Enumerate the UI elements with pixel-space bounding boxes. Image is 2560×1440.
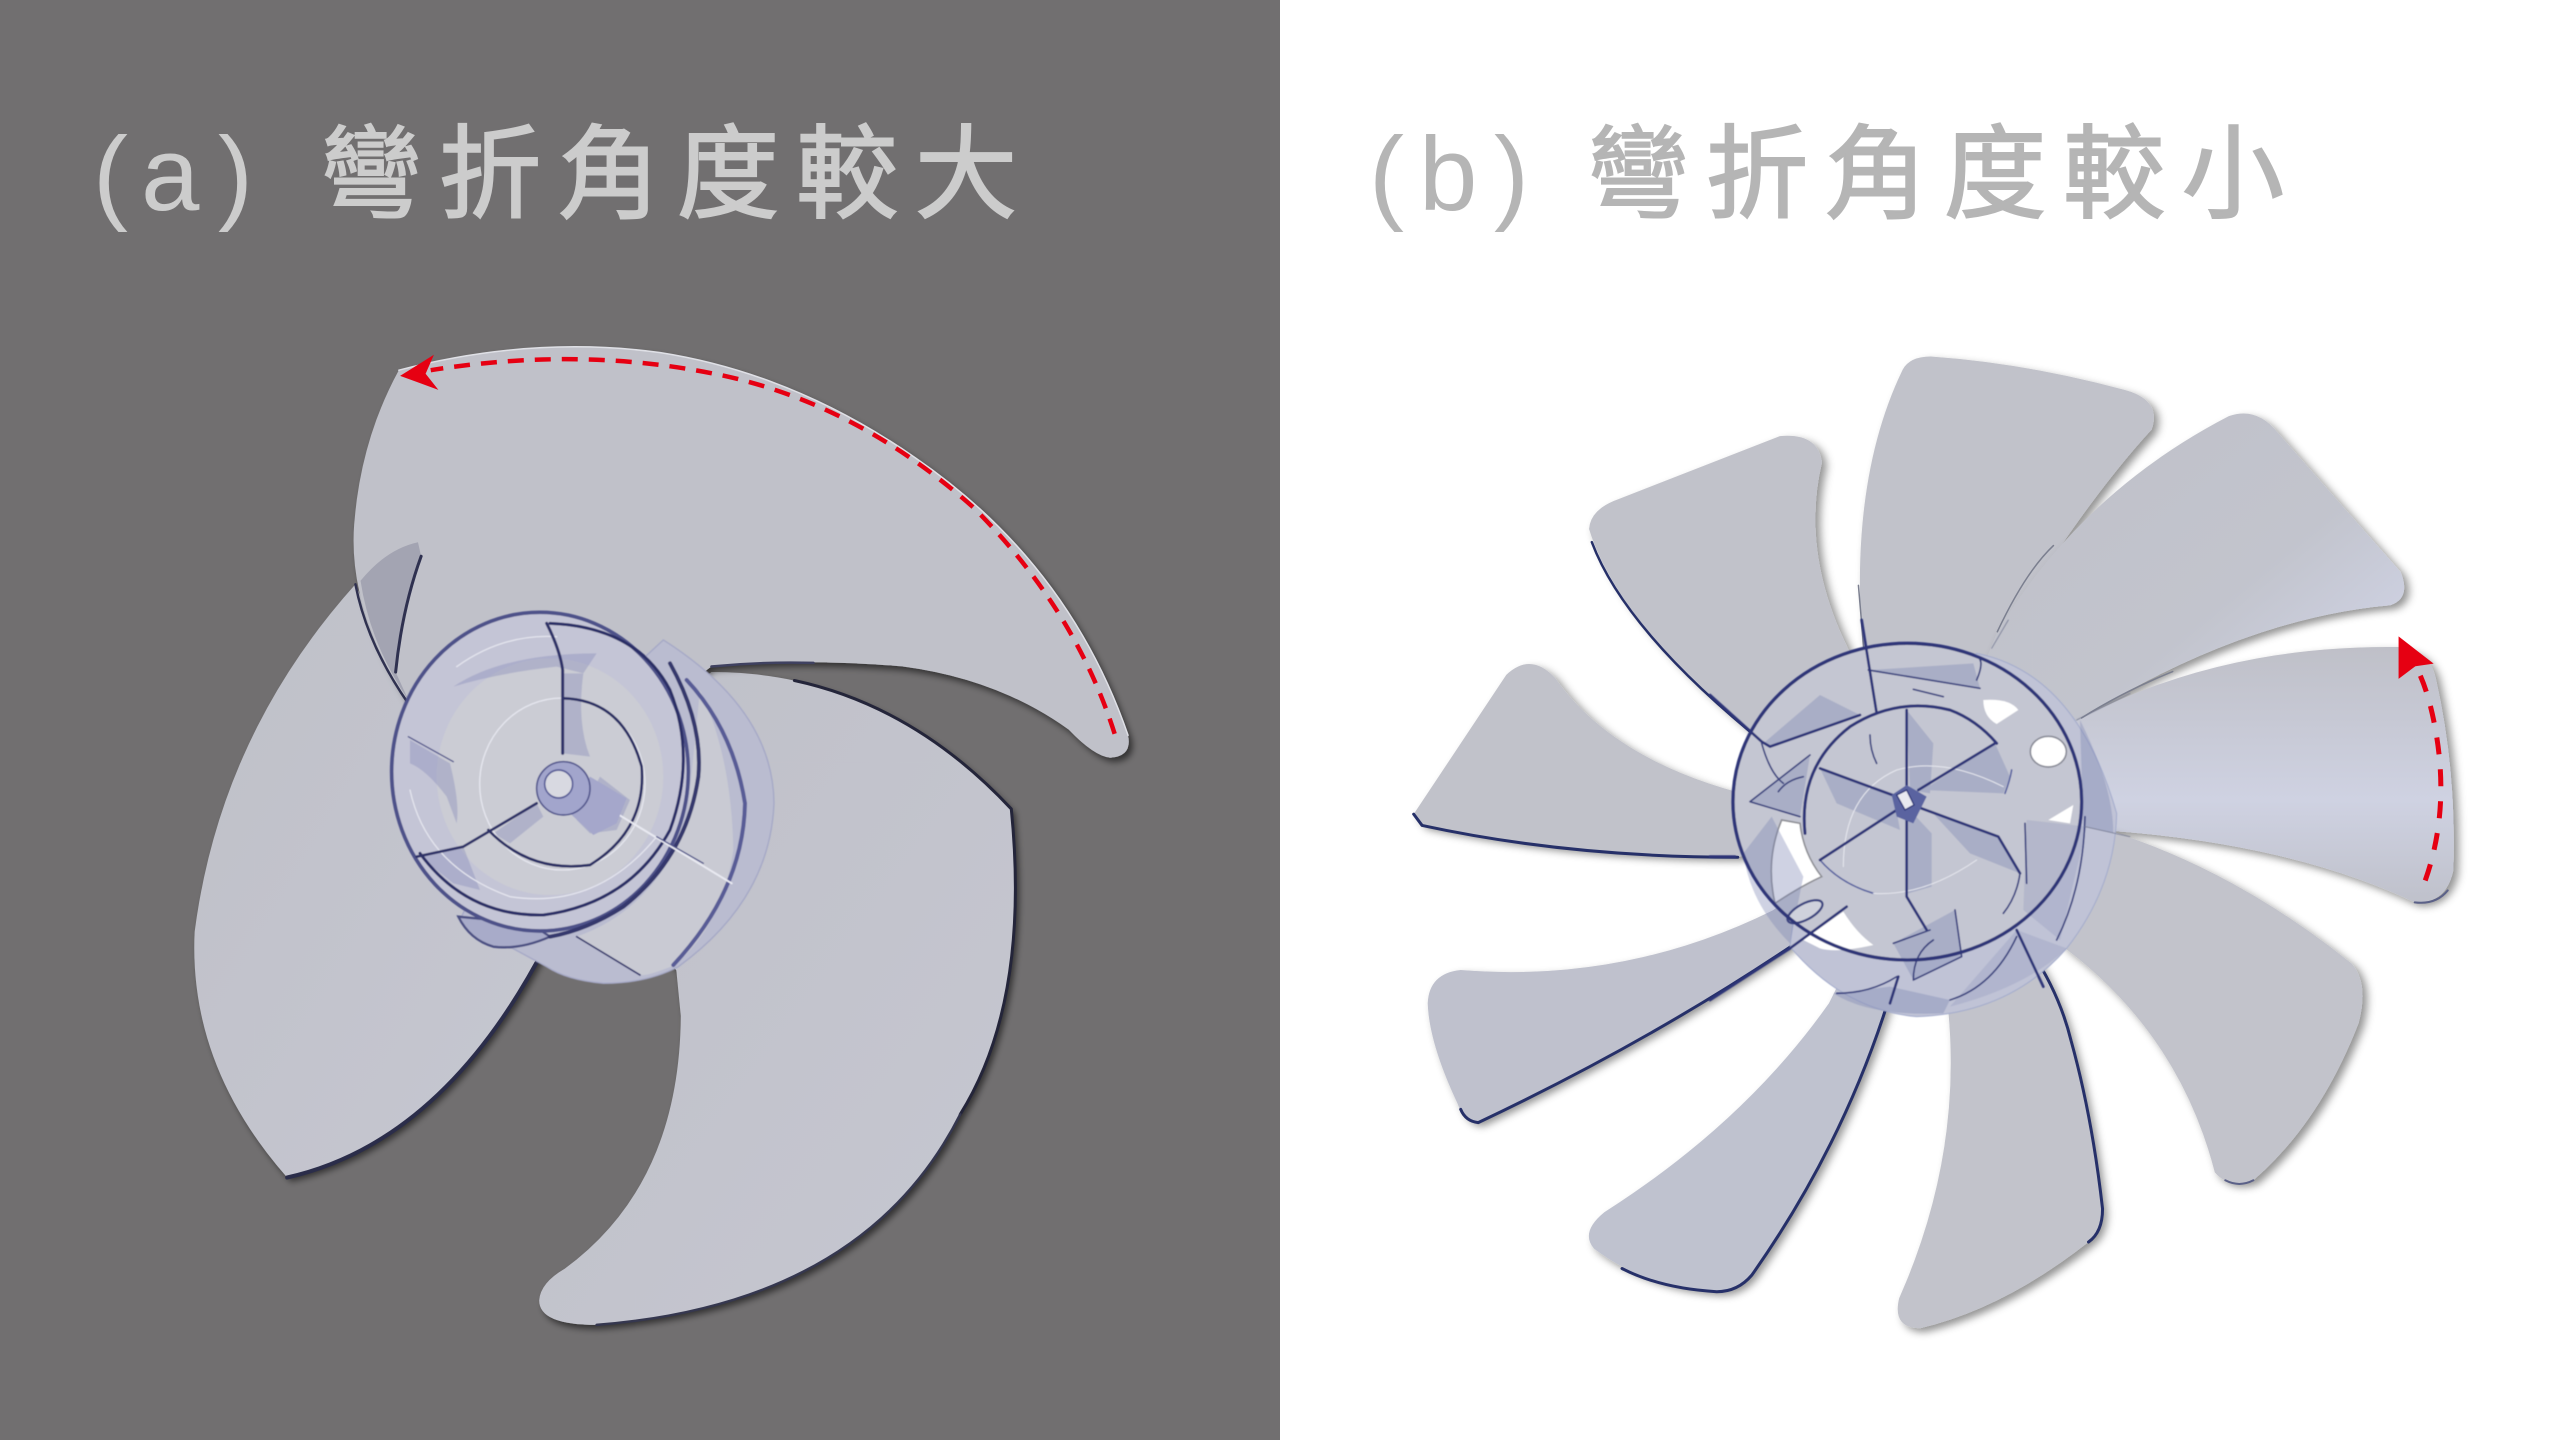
- blade 3: right with arrow: [1927, 647, 2454, 902]
- second ring: [420, 623, 683, 915]
- fan (a): three wide blades: [194, 347, 1129, 1325]
- panel: left dark background: [0, 0, 1280, 1440]
- fan (b): transparent hub: [1710, 620, 2130, 1017]
- blade: top with arc edge: [354, 347, 1129, 791]
- blade edge highlights: [287, 347, 1128, 1325]
- blade edges: [1414, 542, 2448, 1292]
- heading: (a) larger bend angle: (a): [93, 116, 253, 233]
- heading: (a) larger bend angle: 彎折角度較大: [320, 118, 1017, 232]
- third ring: [550, 663, 699, 937]
- outer rim ring: [392, 612, 688, 931]
- white gap: bottom: [1803, 912, 1873, 950]
- blade 9: upper left: [1589, 436, 1927, 804]
- outer rim ellipse: [1733, 643, 2082, 960]
- spoke top: [547, 623, 563, 753]
- inner plate: [437, 658, 663, 895]
- bright ring: [410, 636, 657, 899]
- panel: right white background: [1280, 0, 2560, 1440]
- translucent blue wedges: [410, 653, 630, 890]
- blade 4: lower right: [1927, 804, 2363, 1183]
- hub front disc: [1733, 643, 2082, 960]
- lower right rib: [577, 937, 640, 975]
- blade 2: upper right: [1927, 413, 2404, 804]
- right inner flap: [2023, 820, 2087, 940]
- inner dark arc: [488, 698, 642, 866]
- blade 1: top: [1860, 356, 2154, 804]
- thin grey root lines: [1992, 620, 2130, 837]
- blade 8: far left: [1414, 664, 1927, 857]
- blade 5: bottom: [1898, 804, 2103, 1328]
- white gap: round hole: [2030, 736, 2066, 767]
- center shaft square: [1892, 785, 1927, 823]
- translucent wedges: [1743, 663, 2113, 1014]
- heading: (b) smaller bend angle: (b): [1369, 116, 1529, 233]
- white gap: left crescent: [1771, 820, 1822, 903]
- front face disc: [392, 612, 688, 931]
- bottom lip: [458, 917, 550, 947]
- fan (b): nine narrow blades: [1414, 356, 2454, 1328]
- lower right wall: [1950, 930, 2067, 1007]
- blade: left: [194, 584, 546, 1178]
- cylinder wall light area: [577, 690, 733, 975]
- outer cylinder ring: [673, 680, 745, 965]
- heading: (b) smaller bend angle: 彎折角度較小: [1587, 118, 2284, 232]
- hub back cylinder: [1790, 653, 2117, 1017]
- hub spokes: [1820, 710, 2020, 930]
- white gap: right notch: [2048, 805, 2073, 823]
- red dashed arc arrow: [2399, 636, 2441, 880]
- blade 7: left: [1428, 804, 1927, 1123]
- hub back cylinder: [460, 640, 774, 983]
- spoke right: [600, 803, 732, 883]
- slot: [1784, 896, 1826, 928]
- inner ring: [480, 698, 645, 870]
- blade: lower right: [539, 672, 1015, 1325]
- inner ring arc: [1804, 706, 1997, 833]
- blade root lines: [1710, 620, 2043, 1003]
- inner ring lower arc: [1820, 770, 2012, 893]
- small flap outlines: [1750, 655, 2085, 1000]
- fan (a): transparent hub: [392, 612, 774, 983]
- red dashed arc arrow: [400, 355, 1115, 734]
- spoke lower left: [417, 803, 537, 857]
- center boss: [537, 762, 627, 835]
- blade 6: lower left: [1589, 804, 1927, 1292]
- notch piece at blade root: [355, 542, 421, 704]
- white gap: upper notch: [1983, 700, 2018, 724]
